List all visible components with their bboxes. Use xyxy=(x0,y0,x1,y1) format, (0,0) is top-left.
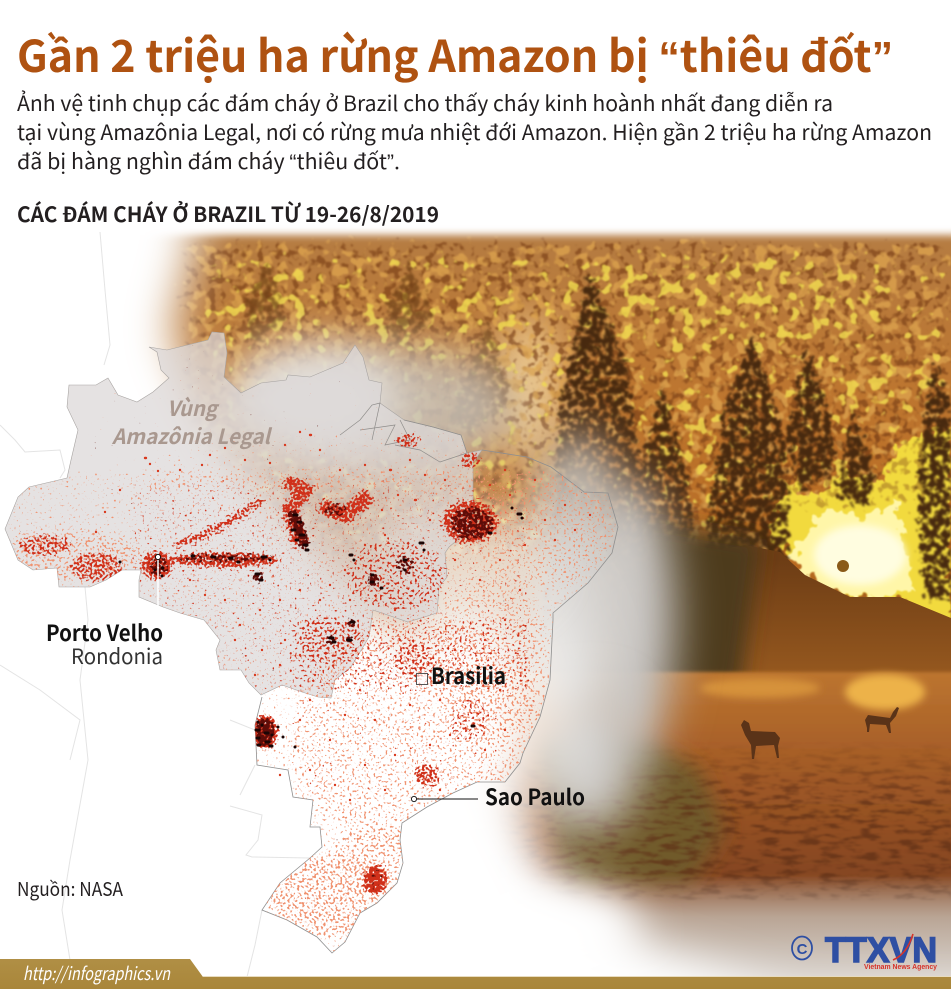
label: Brasilia: Brasilia xyxy=(431,659,506,691)
fire dots: dark clusters xyxy=(148,503,494,892)
subheading: CÁC ĐÁM CHÁY Ở BRAZIL TỪ 19-26/8/2019 xyxy=(17,199,439,229)
label: Vùng Amazônia Legal: Vùng xyxy=(167,393,219,423)
fire dots: light scatter xyxy=(0,430,620,960)
fire dots: scattered round red points xyxy=(96,432,590,800)
label: Porto Velho, Rondonia: Rondonia xyxy=(71,641,163,671)
logo: TTXVN: C xyxy=(797,941,808,958)
icon: deer xyxy=(741,707,899,759)
label: Sao Paulo: Sao Paulo xyxy=(485,780,585,812)
marker: Brasilia square xyxy=(416,674,428,684)
footer url: http://infographics.vn xyxy=(23,960,171,986)
intro text xyxy=(17,88,932,176)
hillside xyxy=(740,546,951,672)
smoke overlay xyxy=(220,340,676,975)
logo: TTXVN: TTXVN xyxy=(825,931,937,970)
intro text: Ảnh vệ tinh chụp các đám cháy ở Brazil cho thấy cháy kinh hoành nhất đang diễn ra xyxy=(17,88,833,118)
flames xyxy=(768,425,951,630)
intro text: đã bị hàng nghìn đám cháy “thiêu đốt”. xyxy=(17,146,400,176)
trees xyxy=(552,270,951,604)
label: Vùng Amazônia Legal: Amazônia Legal xyxy=(111,421,272,451)
river and ground xyxy=(491,670,951,976)
label: Porto Velho, Rondonia xyxy=(46,616,163,671)
logo: TTXVN: Vietnam News Agency xyxy=(864,962,938,971)
map: Amazônia Legal region xyxy=(5,332,482,698)
photo: forest fire with deer xyxy=(120,225,951,989)
marker: Sao Paulo leader line xyxy=(411,796,478,802)
neighbouring country borders xyxy=(0,232,310,977)
footer bar xyxy=(0,959,951,989)
map: Amazon river mouth detail xyxy=(340,403,467,462)
fire dots: red clusters xyxy=(17,432,540,920)
title: Gần 2 triệu ha rừng Amazon bị “thiêu đốt” xyxy=(17,21,893,85)
map: Brazil coast outline xyxy=(255,450,618,953)
fire dots: darkest hot spots xyxy=(120,508,522,747)
label: Vùng Amazônia Legal xyxy=(111,393,272,451)
intro text: tại vùng Amazônia Legal, nơi có rừng mưa nhiệt đới Amazon. Hiện gần 2 triệu ha rừng Amazon xyxy=(17,117,932,147)
marker: Porto Velho pin xyxy=(155,554,161,607)
source: Nguồn: NASA xyxy=(17,875,123,902)
label: Porto Velho, Rondonia: Porto Velho xyxy=(46,616,163,648)
